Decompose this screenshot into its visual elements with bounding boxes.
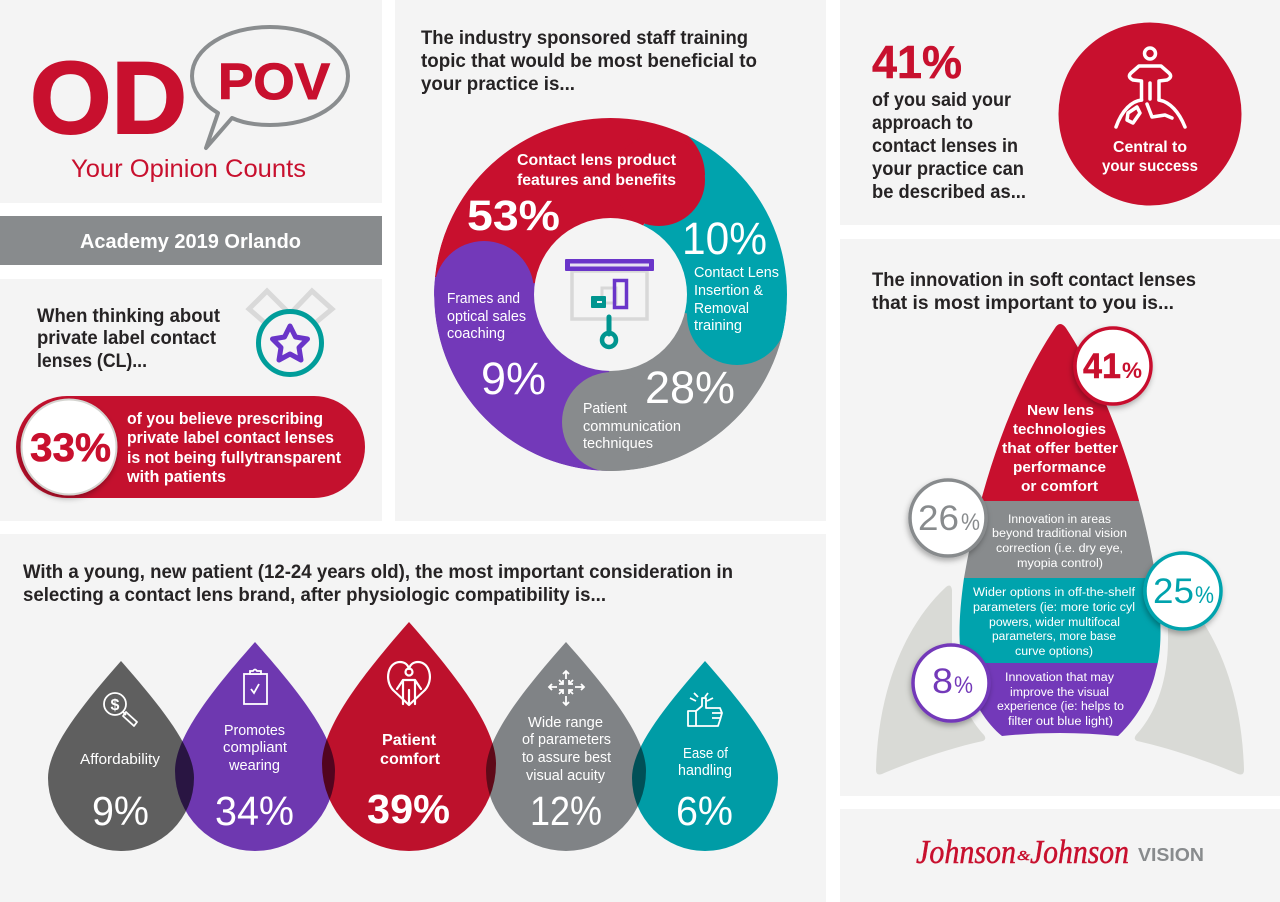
label: 10%: 10% — [682, 213, 767, 264]
badge: 25%: % — [1195, 582, 1214, 609]
heading: that is most important to you is... — [872, 292, 1174, 314]
label: 28% — [583, 362, 735, 452]
label: new lens technologies: technologies — [1013, 421, 1106, 438]
logo: Johnson & Johnson: Johnson — [1030, 834, 1129, 871]
callout: 33%: with patients — [126, 468, 226, 486]
label: off-the-shelf parameters: parameters (ie: more toric cyl — [973, 602, 1135, 614]
panel: logo — [0, 0, 382, 203]
label: 53%: Contact lens product — [517, 152, 676, 169]
heading: lenses (CL)... — [37, 350, 147, 372]
badge: 25%: 25 — [1153, 572, 1194, 611]
label: 9%: Frames and — [447, 291, 520, 307]
panel: private label contact lenses — [0, 279, 382, 521]
item: compliant wearing — [215, 670, 294, 834]
item: ease of handling: handling — [678, 762, 732, 779]
callout: 33%: of you believe prescribing — [127, 410, 323, 428]
rocket fin: left — [876, 586, 985, 774]
droplet: patient comfort — [322, 622, 496, 851]
banner: Academy 2019 Orlando: Academy 2019 Orlando — [80, 231, 301, 253]
badge: 26%: % — [961, 509, 980, 536]
item: parameters: 12% — [530, 788, 602, 834]
label: 28%: techniques — [583, 436, 653, 452]
item: ease of handling: Ease of — [683, 745, 729, 762]
panel: young patient consideration — [0, 534, 826, 902]
heading — [37, 305, 220, 372]
label: beyond vision correction: myopia control) — [1017, 558, 1103, 570]
heading: With a young, new patient (12-24 years old), the most important consideration in — [23, 561, 733, 583]
heading: selecting a contact lens brand, after physiologic compatibility is... — [23, 584, 606, 606]
rocket fin: right — [1135, 586, 1244, 774]
item: affordability: $ — [111, 697, 120, 714]
item: patient comfort: comfort — [380, 751, 441, 768]
label: beyond vision correction: beyond traditional vision — [992, 528, 1127, 540]
icon: medal with star — [249, 291, 332, 374]
panel: staff training topic — [395, 0, 826, 521]
item: compliant wearing: compliant — [223, 739, 288, 756]
label: 10%: Removal — [694, 301, 749, 317]
label: new lens technologies: that offer better — [1002, 440, 1118, 457]
item: patient comfort: Patient — [382, 732, 437, 749]
label: 10%: Insertion & — [694, 283, 763, 299]
icon: speech bubble — [192, 27, 348, 148]
label: beyond vision correction — [992, 514, 1127, 570]
label: new lens technologies: or comfort — [1021, 478, 1098, 495]
badge: 25% — [1145, 553, 1221, 629]
item: affordability: Affordability — [80, 751, 161, 768]
item: compliant wearing: wearing — [228, 757, 280, 774]
heading: private label contact — [37, 327, 216, 349]
droplet: parameters — [486, 642, 646, 851]
logo: OD: OD — [30, 41, 187, 155]
badge: 41%: 41 — [1083, 347, 1121, 386]
item: ease of handling: 6% — [676, 788, 733, 834]
icon: presentation board — [565, 259, 654, 347]
heading: When thinking about — [37, 305, 220, 327]
text block: be described as... — [872, 181, 1026, 203]
badge: central to your success — [1058, 22, 1242, 206]
label: off-the-shelf parameters — [973, 587, 1136, 658]
badge: central to your success: Central to — [1113, 139, 1187, 156]
icon: person on globe — [1116, 48, 1185, 127]
label: 9% — [447, 291, 546, 404]
label: 53%: 53% — [467, 192, 560, 240]
label: off-the-shelf parameters: Wider options in off-the-shelf — [973, 587, 1136, 599]
label: visual experience: Innovation that may — [1005, 672, 1114, 684]
heading — [421, 27, 757, 95]
text block: approach to — [872, 112, 973, 134]
label: visual experience: improve the visual — [1010, 687, 1109, 699]
heading: The innovation in soft contact lenses — [872, 269, 1196, 291]
callout: 33%: is not being fullytransparent — [127, 449, 341, 467]
item: affordability — [80, 693, 161, 834]
label: 53% — [467, 152, 676, 240]
panel: approach to contact lenses — [840, 0, 1280, 225]
text block: your practice can — [872, 158, 1024, 180]
label: visual experience: filter out blue light) — [1008, 716, 1113, 728]
label: off-the-shelf parameters: powers, wider multifocal — [989, 617, 1120, 629]
label: 9%: optical sales — [447, 309, 526, 325]
badge: 8% — [913, 645, 989, 721]
label: 28%: communication — [583, 419, 681, 435]
badge: 8%: 8 — [932, 662, 953, 701]
item: compliant wearing: 34% — [215, 788, 294, 834]
badge: 8%: % — [954, 672, 973, 699]
segment: visual experience — [980, 663, 1158, 736]
label: new lens technologies — [1002, 402, 1118, 495]
label: beyond vision correction: correction (i.e. dry eye, — [996, 543, 1123, 555]
label: 28%: Patient — [583, 401, 627, 417]
logo: Johnson & Johnson: & — [1017, 849, 1030, 864]
label: 9%: 9% — [481, 353, 546, 404]
stat: 41%: 41% — [872, 36, 962, 88]
chart: droplets — [48, 622, 778, 851]
item: compliant wearing: Promotes — [224, 722, 285, 739]
segment: off-the-shelf parameters — [960, 578, 1160, 663]
item: ease of handling — [676, 693, 733, 834]
label: visual experience — [997, 672, 1124, 728]
item: parameters — [522, 671, 612, 834]
label: 53%: features and benefits — [517, 172, 676, 189]
label: new lens technologies: performance — [1013, 459, 1106, 476]
label: new lens technologies: New lens — [1027, 402, 1094, 419]
label: off-the-shelf parameters: parameters, more base — [992, 631, 1116, 643]
logo: Johnson & Johnson: Johnson — [916, 834, 1016, 871]
text block: contact lenses in — [872, 135, 1018, 157]
callout: 33% — [16, 396, 365, 498]
item: parameters: of parameters — [522, 731, 611, 748]
label: 28%: 28% — [645, 362, 735, 413]
heading: topic that would be most beneficial to — [421, 50, 757, 72]
item: patient comfort: 39% — [367, 786, 450, 832]
heading — [23, 561, 733, 606]
panel: innovation in soft contact lenses — [840, 239, 1280, 796]
label: 10% — [682, 213, 779, 334]
segment: beyond vision correction — [964, 501, 1154, 578]
badge: 41% — [1075, 328, 1151, 404]
callout: 33%: 33% — [30, 426, 111, 470]
rocket body — [960, 324, 1160, 736]
droplet: ease of handling — [632, 661, 778, 851]
badge: 26%: 26 — [918, 499, 959, 538]
badge: 26% — [910, 480, 986, 556]
banner: Academy 2019 Orlando — [0, 216, 382, 265]
panel: Johnson & Johnson Vision logo — [840, 809, 1280, 902]
logo: Johnson & Johnson — [916, 834, 1129, 871]
label: 10%: Contact Lens — [694, 265, 779, 281]
segment: new lens technologies — [982, 324, 1139, 501]
label: visual experience: experience (ie: helps to — [997, 701, 1124, 713]
chart: swirl donut — [434, 118, 787, 472]
tagline: Your Opinion Counts — [71, 155, 306, 183]
label: beyond vision correction: Innovation in areas — [1008, 514, 1111, 526]
item: parameters: Wide range — [528, 714, 603, 731]
text block — [872, 89, 1026, 203]
label: off-the-shelf parameters: curve options) — [1015, 646, 1093, 658]
text block: of you said your — [872, 89, 1011, 111]
heading: The industry sponsored staff training — [421, 27, 748, 49]
item: patient comfort — [367, 662, 450, 832]
item: affordability: 9% — [92, 788, 149, 834]
label: 9%: coaching — [447, 326, 505, 342]
logo: POV: POV — [218, 53, 330, 110]
droplet: compliant wearing — [175, 642, 335, 851]
badge: central to your success: your success — [1102, 158, 1198, 175]
heading: your practice is... — [421, 73, 575, 95]
logo: VISION: VISION — [1138, 845, 1204, 865]
heading — [872, 269, 1196, 314]
label: 10%: training — [694, 318, 742, 334]
item: parameters: to assure best — [522, 749, 612, 766]
callout: 33%: private label contact lenses — [127, 429, 334, 447]
badge: 41%: % — [1122, 358, 1142, 383]
item: parameters: visual acuity — [526, 767, 605, 784]
droplet: affordability — [48, 661, 194, 851]
